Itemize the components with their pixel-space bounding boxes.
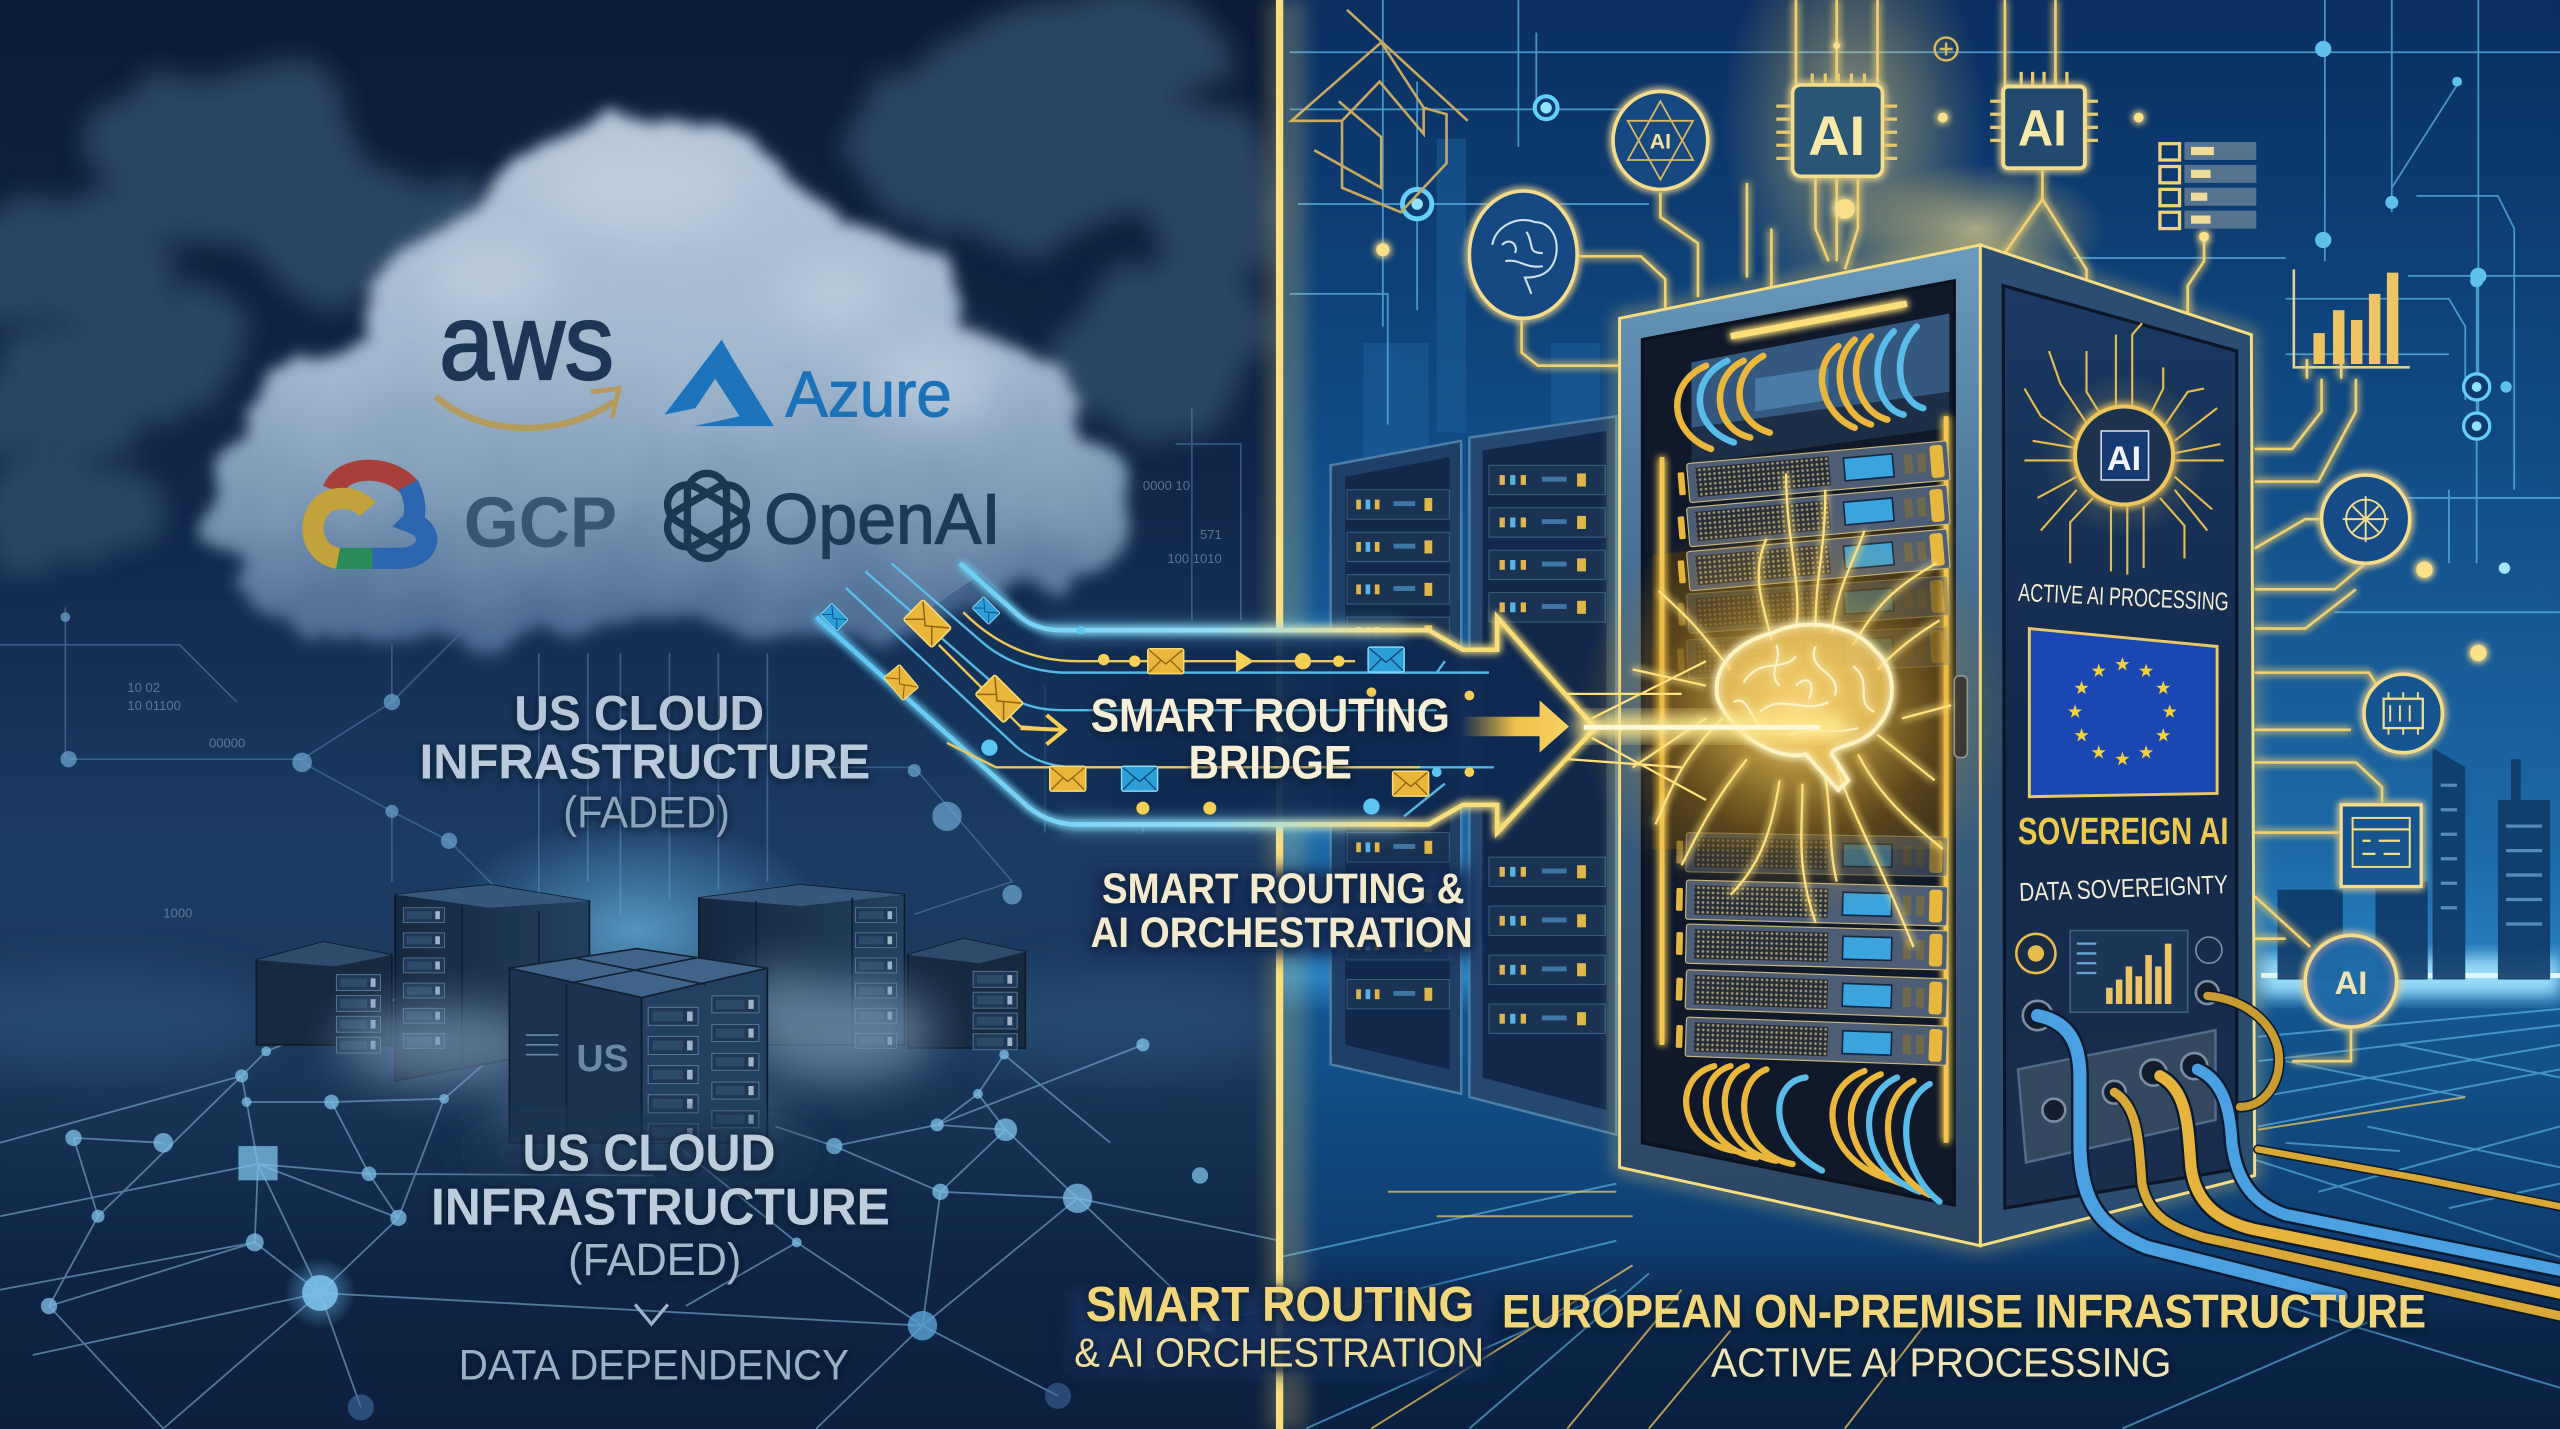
heading: US cloud infrastructure lower: INFRASTRUCTURE (431, 1178, 890, 1236)
cloud highlights (425, 142, 996, 426)
cable: gold thin (2114, 1092, 2560, 1316)
cables top (1677, 327, 1923, 449)
caption: smart routing and AI orchestration: SMART ROUTING & (1102, 865, 1464, 912)
panel text: data sovereignty: DATA SOVEREIGNTY (2019, 869, 2229, 907)
tower: central US (509, 949, 767, 1143)
flowing gold path (939, 612, 1420, 767)
icon: AI chip small (1990, 72, 2098, 168)
US server towers (256, 885, 1025, 1177)
rack interior warm mid tone (1652, 522, 1949, 849)
chart: gold bar chart (2294, 269, 2410, 367)
server units lower (1675, 832, 1948, 1065)
rack side frame (1980, 245, 2255, 1246)
icon: server list (2160, 142, 2256, 229)
blue circuit lines (1290, 0, 2560, 612)
tower: far right (908, 939, 1025, 1050)
faint circuit overlay: left (0, 408, 1241, 914)
skyline faint left of rack (1363, 139, 1600, 457)
faint circuit nodes and code text: 571 (1200, 527, 1222, 542)
caption: European on-premise infrastructure: EUROPEAN ON-PREMISE INFRASTRUCTURE (1502, 1285, 2426, 1338)
background: left dark side (0, 0, 1280, 1429)
cable: blue second (2198, 1069, 2560, 1270)
envelopes (903, 600, 951, 648)
gold circuit traces (1522, 0, 2382, 1061)
tower: back right (699, 885, 905, 1048)
panel AI emblem (2024, 323, 2224, 575)
panel port plate (2018, 1030, 2215, 1162)
heading: smart routing bridge: SMART ROUTING (1091, 689, 1450, 742)
arrow outline (816, 563, 1595, 833)
tower: far left (256, 942, 392, 1053)
glow behind US servers (441, 816, 833, 1045)
icon: glowing brain (1717, 625, 1892, 790)
icon: AI chip large (1776, 73, 1897, 176)
icon: AI circle bottom: AI (2335, 964, 2367, 1001)
icon: circuit circle (2322, 475, 2410, 563)
icon: window box (2341, 805, 2421, 886)
faint circuit nodes and code text: 1000 (163, 906, 192, 921)
cable: gold floor (2258, 1149, 2560, 1206)
heading: US cloud infrastructure upper: (FADED) (563, 789, 730, 838)
left network floor (0, 971, 1290, 1429)
faint circuit nodes and code text (60, 478, 1222, 921)
caption: smart routing gold (1074, 1278, 1484, 1375)
server units upper (1677, 441, 1950, 680)
caption: smart routing gold: SMART ROUTING (1086, 1278, 1474, 1332)
icon: AI chip small: AI (2018, 99, 2067, 156)
rack outer glow (1620, 245, 2255, 1246)
logo: Azure (665, 340, 952, 430)
dark storm clouds (0, 0, 1282, 563)
blue circuit nodes (1402, 41, 2512, 574)
cyan glow on divider crossings (1045, 630, 1404, 824)
icon: chip circle (2364, 674, 2442, 753)
heading: US cloud infrastructure lower: US CLOUD (522, 1125, 776, 1183)
logo: Azure: Azure (785, 357, 952, 430)
inner gold arrow (1461, 700, 1569, 753)
heading: US cloud infrastructure lower: (FADED) (568, 1234, 741, 1285)
data cables (2038, 996, 2560, 1316)
gold geometric S mark (1291, 10, 1468, 212)
EU flag (2029, 629, 2217, 797)
icon: AI circle bottom (2305, 935, 2397, 1027)
small gold direction arrow (1020, 715, 1064, 744)
heading: US cloud infrastructure upper (420, 687, 870, 838)
gold glow above rack (1722, 0, 2106, 335)
caption: European on-premise infrastructure (1502, 1285, 2426, 1385)
caption: smart routing gold: & AI ORCHESTRATION (1074, 1329, 1484, 1375)
route dots (1098, 650, 1474, 815)
skyline right (2278, 748, 2550, 980)
panel AI emblem: AI (2107, 440, 2141, 478)
main US cloud (206, 114, 1130, 640)
cable: gold loop (2207, 996, 2279, 1107)
door handle (1954, 676, 1967, 758)
right perspective floor grid (1280, 1009, 2560, 1429)
logo: GCP (313, 470, 617, 563)
chevron (635, 1304, 668, 1324)
logo: OpenAI: OpenAI (764, 480, 1001, 560)
logo: GCP: GCP (464, 483, 617, 563)
panel mini chart and gauge (2016, 931, 2222, 1012)
logo: OpenAI (660, 473, 1001, 560)
track lines (846, 563, 1494, 816)
caption: European on-premise infrastructure: ACTIVE AI PROCESSING (1711, 1339, 2171, 1385)
rack front frame (1620, 245, 1980, 1246)
central brain glow (1575, 506, 2016, 914)
rack interior (1642, 281, 1954, 1205)
central vertical divider (1267, 0, 1306, 1429)
tower: back left (395, 885, 589, 1081)
horizon glow (2261, 957, 2560, 996)
smart routing arrow (816, 563, 1595, 833)
heading: US cloud infrastructure upper: INFRASTRUCTURE (420, 736, 870, 790)
icon: atom AI circle (1613, 91, 1708, 189)
heading: smart routing bridge (1091, 689, 1450, 790)
back server cabinets (1331, 416, 1616, 1135)
icon: brain circle (1469, 191, 1577, 318)
faint circuit nodes and code text: 100 1010 (1167, 551, 1222, 566)
logo: AWS: aws (439, 281, 614, 402)
heading: US cloud infrastructure lower (431, 1125, 890, 1285)
energy beam into rack (1567, 661, 1845, 800)
main server rack (1575, 245, 2255, 1246)
top light bar (1731, 304, 1907, 336)
ports (2023, 981, 2219, 1122)
cable: blue long (2038, 1015, 2341, 1296)
side display panel (2003, 286, 2237, 1208)
caption: smart routing and AI orchestration (1091, 865, 1473, 956)
gold dots (1376, 42, 2486, 661)
caption: data dependency: DATA DEPENDENCY (459, 1342, 849, 1389)
faint circuit nodes and code text: 10 02 (127, 680, 160, 695)
icon: atom AI circle: AI (1650, 131, 1671, 154)
caption: smart routing and AI orchestration: AI ORCHESTRATION (1091, 909, 1473, 956)
arrow body (865, 575, 1595, 833)
icon: small top badge (1935, 38, 1958, 60)
dark halos behind centre captions (1069, 869, 1486, 1375)
faint circuit nodes and code text: 0000 10 (1143, 478, 1190, 493)
faint circuit nodes and code text: 00000 (209, 736, 245, 751)
fog foreground (460, 1125, 820, 1177)
fog around towers (340, 971, 936, 1144)
tower US label: US (576, 1037, 629, 1079)
background: right blue side (1280, 0, 2560, 1429)
top patch panels (1691, 313, 1949, 464)
side gold light bars (1662, 416, 1946, 1143)
panel text: active AI processing: ACTIVE AI PROCESSING (2018, 579, 2229, 616)
panel text: sovereign AI: SOVEREIGN AI (2018, 810, 2229, 852)
heading: smart routing bridge: BRIDGE (1189, 737, 1352, 790)
faint circuit nodes and code text: 10 01100 (127, 698, 181, 713)
heading: US cloud infrastructure upper: US CLOUD (514, 687, 764, 741)
cable: gold thick (2160, 1076, 2560, 1293)
cables bottom (1686, 1066, 1822, 1171)
icon: AI chip large: AI (1808, 105, 1865, 167)
lightning traces (1633, 473, 1951, 947)
